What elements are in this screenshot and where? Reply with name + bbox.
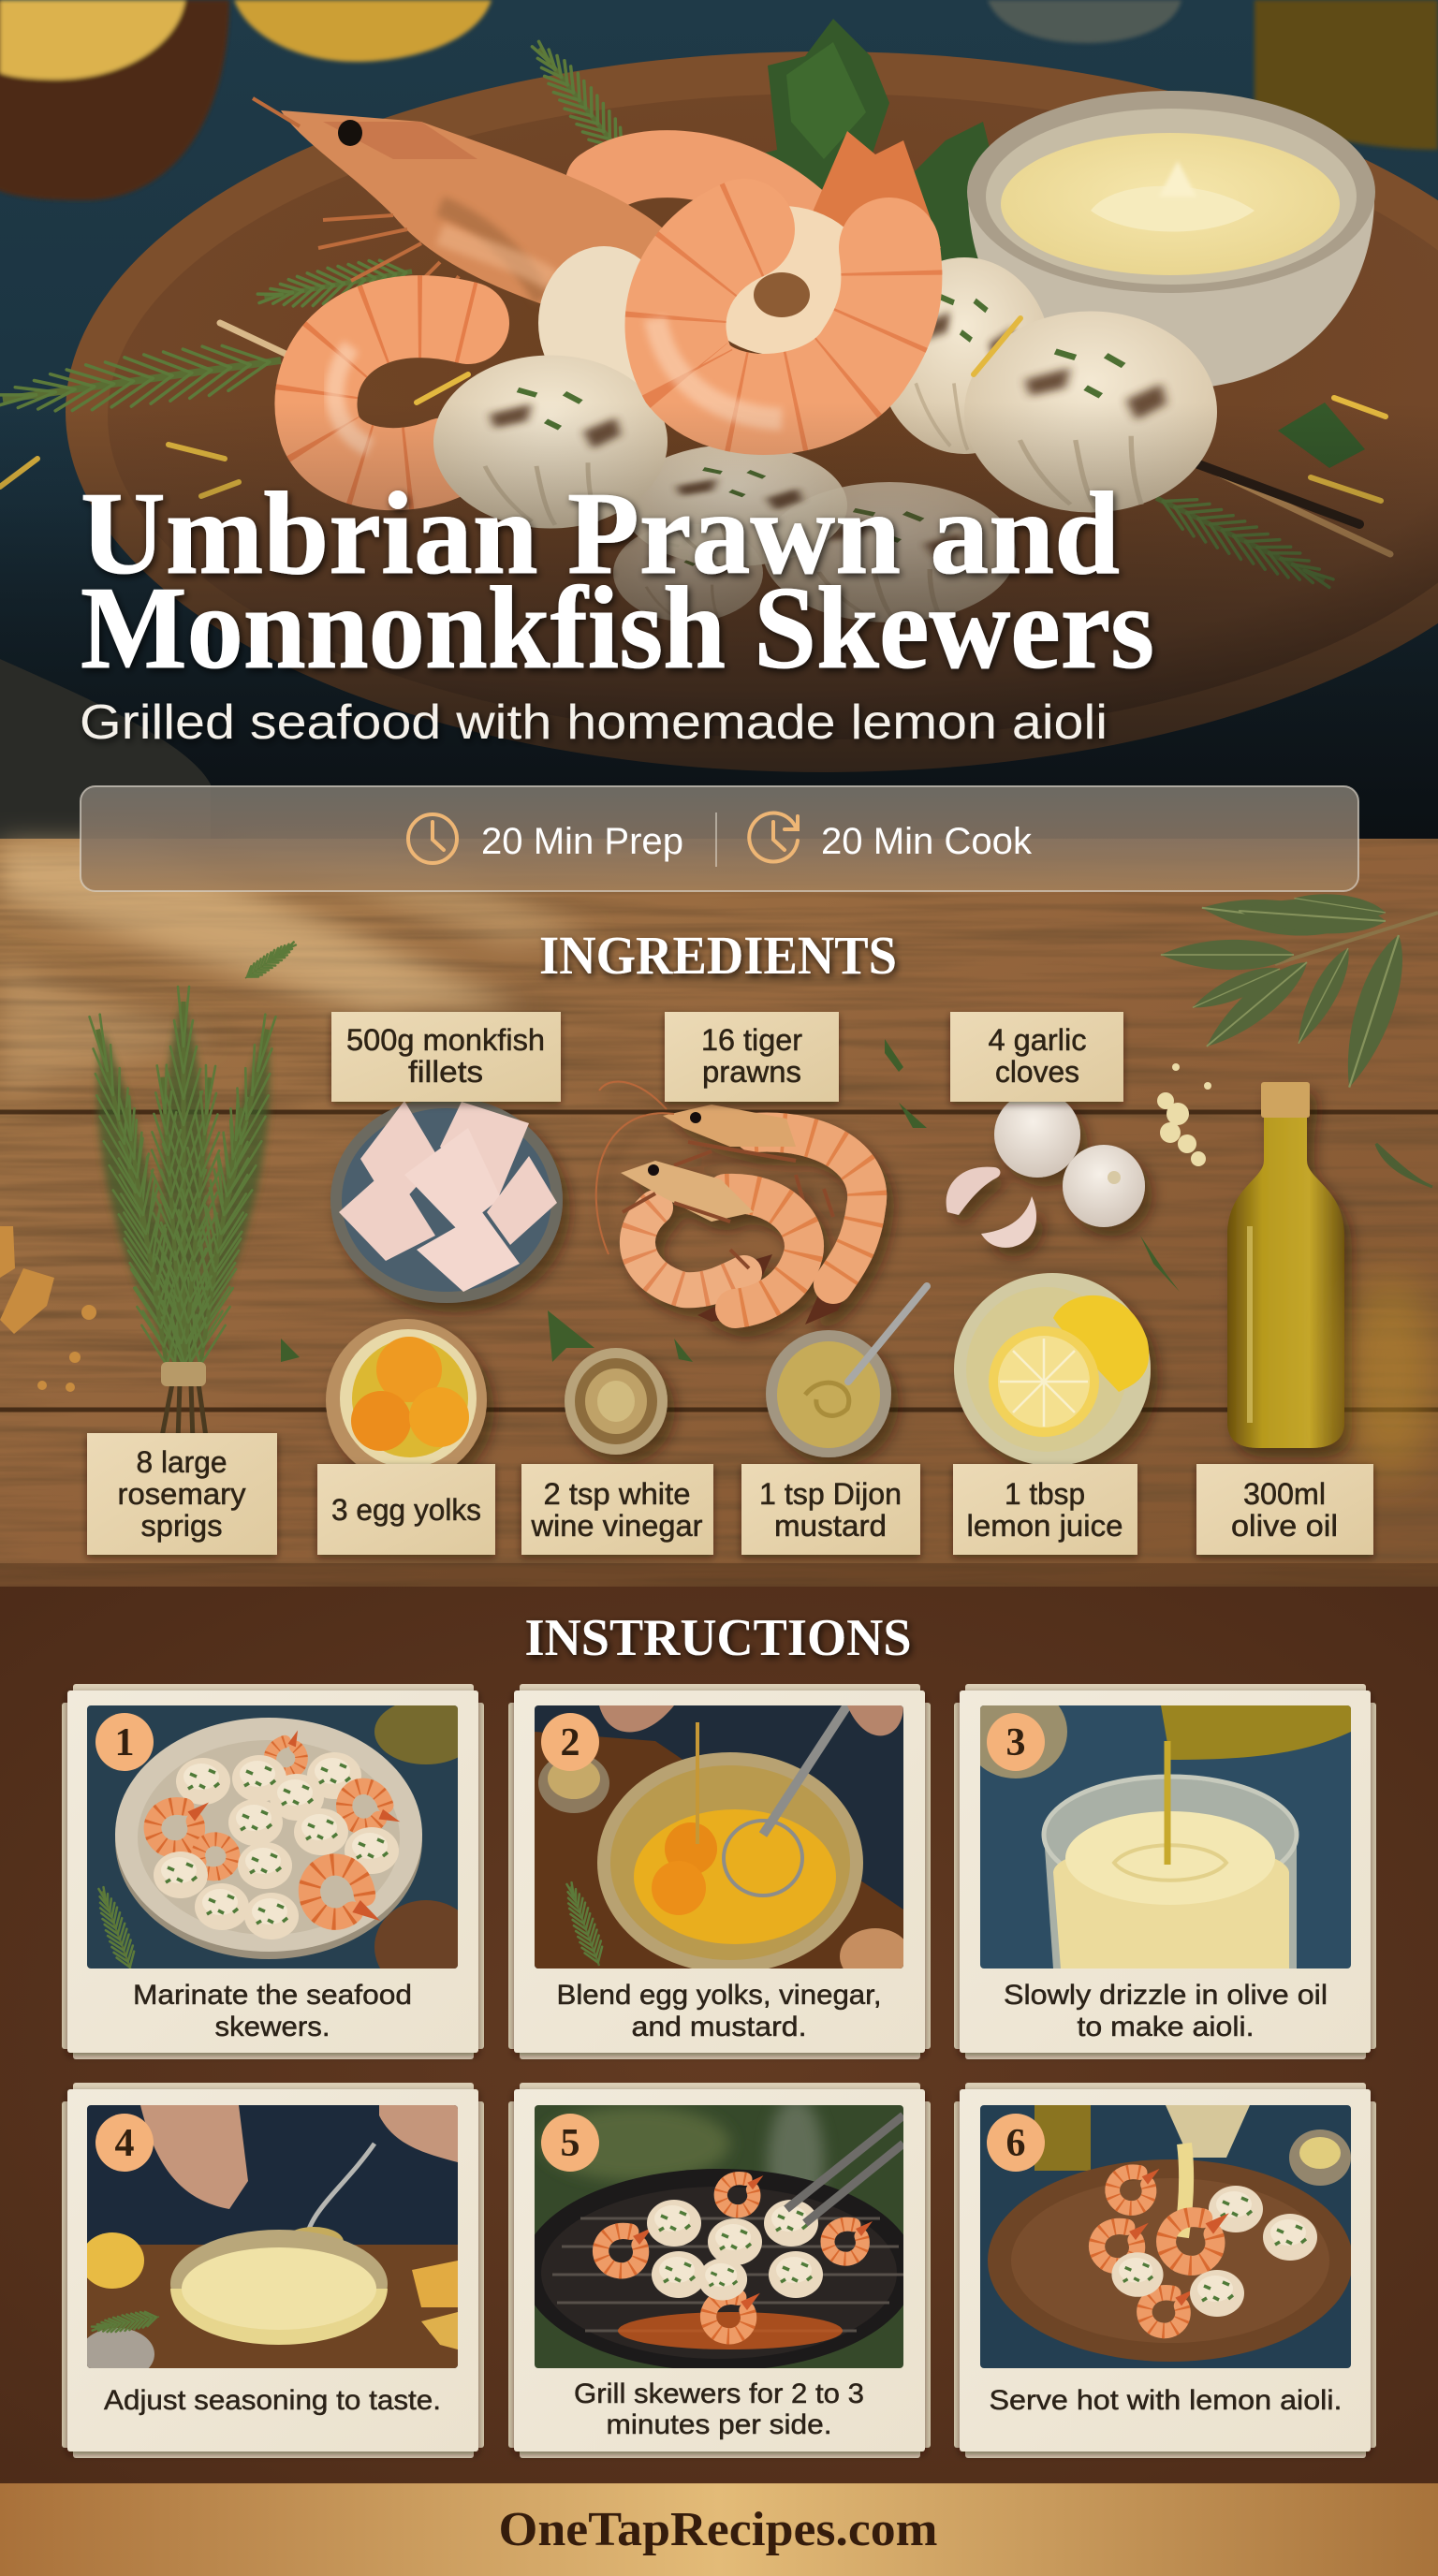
ingredients heading: INGREDIENTS: [539, 925, 897, 986]
caption 5: [574, 2378, 864, 2440]
label: tiger prawns: prawns: [702, 1055, 801, 1089]
label: monkfish: 500g monkfish: [346, 1023, 545, 1057]
label: mustard: mustard: [774, 1509, 887, 1543]
label: rosemary: [87, 1433, 277, 1555]
mustard bowl: [766, 1330, 891, 1457]
wood background: [0, 839, 1438, 1588]
photo: adjusting seasoning: [80, 2105, 458, 2380]
step 2 card: [508, 1684, 931, 2059]
label: egg yolks: 3 egg yolks: [331, 1493, 481, 1527]
label: rosemary: sprigs: [140, 1509, 223, 1543]
skewers: [220, 323, 1390, 554]
big prawn: [655, 131, 941, 419]
step 3 card: [954, 1684, 1376, 2059]
label: olive oil: [1196, 1464, 1373, 1555]
divider: [715, 812, 717, 867]
hero section: [0, 0, 1438, 842]
badge 4: [95, 2114, 154, 2172]
step 1 card: [62, 1684, 484, 2059]
caption 3: to make aioli.: [1077, 2012, 1255, 2042]
label: lemon juice: 1 tbsp: [1005, 1477, 1085, 1511]
label: tiger prawns: [665, 1012, 839, 1102]
oil glass: [1255, 0, 1438, 150]
olive branch: [1161, 887, 1438, 1093]
caption 6: Serve hot with lemon aioli.: [989, 2385, 1343, 2416]
badge 3: [987, 1713, 1045, 1771]
prawn with head: [253, 98, 675, 346]
photo: serving: [980, 2105, 1353, 2368]
badge 3: 3: [1005, 1721, 1026, 1764]
rosemary bundle: [74, 987, 291, 1442]
time bar: [81, 786, 1358, 891]
lemon plate: [954, 1273, 1151, 1466]
icon: cook timer: [749, 813, 798, 862]
cook time: 20 Min Cook: [821, 821, 1033, 862]
wooden bowl with grated cheese: [0, 0, 229, 200]
oil glow: [1343, 1273, 1437, 1479]
herb scatter: [281, 1039, 1180, 1362]
instructions heading: INSTRUCTIONS: [524, 1609, 912, 1667]
leaf: [1376, 1144, 1432, 1187]
label: lemon juice: lemon juice: [966, 1509, 1123, 1543]
label: rosemary: 8 large: [137, 1445, 227, 1479]
step 6 card: [954, 2083, 1376, 2458]
parsley leaf: [1278, 402, 1365, 468]
caption 3: [1004, 1980, 1328, 2042]
label: garlic: cloves: [995, 1055, 1079, 1089]
label: mustard: 1 tsp Dijon: [759, 1477, 902, 1511]
label: egg yolks: [317, 1464, 495, 1555]
photo: marinating seafood: [87, 1705, 458, 1969]
left prawn: [316, 316, 468, 469]
badge 2: [541, 1713, 599, 1771]
wooden plate: [66, 51, 1438, 772]
caption 1: Marinate the seafood: [133, 1980, 412, 2011]
title: [81, 469, 1154, 694]
caption 1: skewers.: [215, 2012, 330, 2042]
vinegar glass: [565, 1348, 668, 1455]
caption 3: Slowly drizzle in olive oil: [1004, 1980, 1328, 2011]
small rosemary sprig: [242, 938, 299, 984]
chopped garlic: [1157, 1063, 1211, 1166]
olive oil bottle: [1227, 1082, 1344, 1448]
lemon: [234, 0, 492, 62]
step 5 card: [508, 2083, 931, 2458]
spoon: [848, 1286, 927, 1382]
badge 1: [95, 1713, 154, 1771]
upper prawn: [663, 1105, 867, 1325]
icon: prep clock: [408, 814, 457, 863]
caption 2: and mustard.: [631, 2012, 807, 2042]
rosemary sprigs on plate: [0, 34, 1339, 599]
label: rosemary: rosemary: [118, 1477, 245, 1511]
rear prawn: [599, 164, 805, 220]
curled prawn: [638, 1208, 772, 1290]
tiger prawns: [596, 1081, 867, 1325]
photo: grilling: [535, 2105, 903, 2368]
caption 5: minutes per side.: [607, 2409, 831, 2440]
badge 5: 5: [560, 2122, 580, 2165]
label: olive oil: olive oil: [1231, 1509, 1338, 1543]
badge 1: 1: [114, 1721, 135, 1764]
lower prawn: [621, 1161, 804, 1322]
caption 2: [556, 1980, 882, 2042]
label: vinegar: wine vinegar: [530, 1509, 703, 1543]
subtitle: Grilled seafood with homemade lemon aioli: [80, 695, 1108, 750]
label: garlic: [950, 1012, 1123, 1102]
parsley: [693, 19, 997, 402]
aioli bowl: [967, 91, 1375, 389]
ingredient labels: [87, 1012, 1373, 1555]
lemon zest: [0, 318, 1386, 501]
breadcrumbs: [0, 1226, 96, 1392]
badge 5: [541, 2114, 599, 2172]
label: olive oil: 300ml: [1243, 1477, 1326, 1511]
label: monkfish: fillets: [408, 1055, 483, 1089]
dark cloth: [0, 659, 211, 842]
caption 1: [133, 1980, 412, 2042]
label: mustard: [741, 1464, 920, 1555]
egg yolks bowl: [326, 1319, 487, 1482]
monkfish plate: [330, 1097, 563, 1303]
label: garlic: 4 garlic: [989, 1023, 1086, 1057]
caption 4: Adjust seasoning to taste.: [104, 2385, 441, 2416]
prep time: 20 Min Prep: [481, 821, 683, 862]
label: vinegar: [521, 1464, 713, 1555]
dark overlay: [0, 402, 1438, 842]
footer: [0, 2483, 1438, 2576]
badge 2: 2: [560, 1721, 580, 1764]
title: Monnonkfish Skewers: [81, 564, 1154, 694]
instructions section: [0, 1587, 1438, 2483]
step 4 card: [62, 2083, 484, 2458]
badge 6: [987, 2114, 1045, 2172]
photo: blending yolks: [535, 1705, 911, 1984]
title: Umbrian Prawn and: [81, 469, 1120, 599]
label: vinegar: 2 tsp white: [543, 1477, 691, 1511]
caption 2: Blend egg yolks, vinegar,: [556, 1980, 882, 2011]
caption 5: Grill skewers for 2 to 3: [574, 2378, 864, 2409]
grilled prawns and monkfish: [253, 98, 1217, 622]
label: lemon juice: [953, 1464, 1137, 1555]
glass: [988, 0, 1181, 43]
brown background: [0, 1587, 1438, 2483]
ingredients section: [0, 839, 1438, 1588]
website: OneTapRecipes.com: [498, 2503, 938, 2556]
label: tiger prawns: 16 tiger: [701, 1023, 802, 1057]
photo: drizzling oil: [980, 1705, 1351, 1969]
label: monkfish: [331, 1012, 561, 1102]
badge 4: 4: [114, 2122, 135, 2165]
badge 6: 6: [1005, 2122, 1026, 2165]
garlic: [946, 1081, 1145, 1248]
